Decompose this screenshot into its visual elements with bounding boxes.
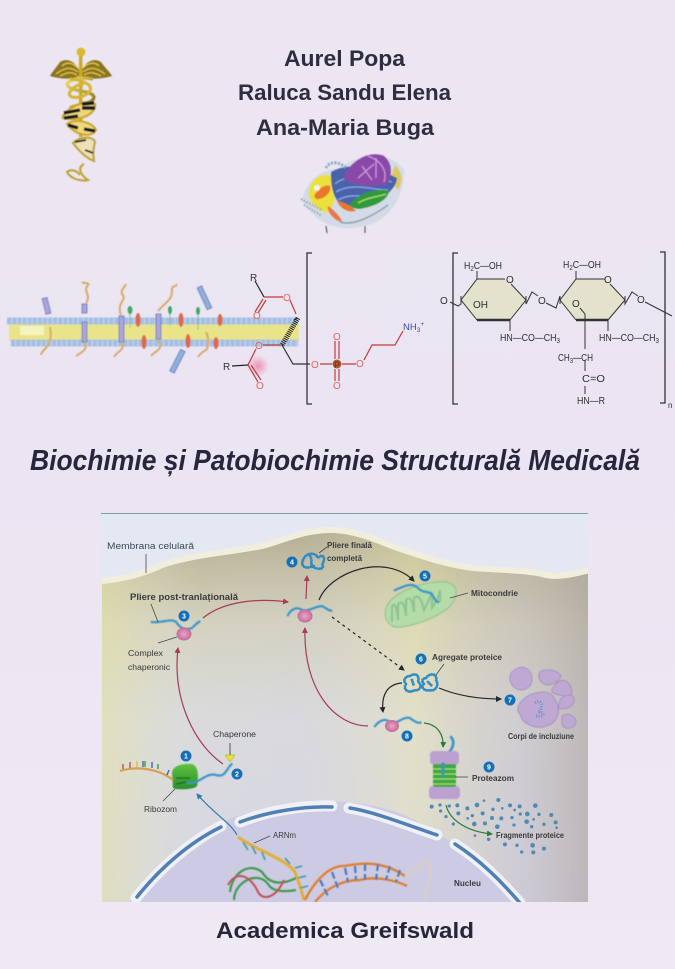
chemical structure: peptidoglycan repeat: 2 [569,265,573,272]
proteasome [429,751,460,799]
diagram labels: Fragmente proteice [496,831,564,840]
chemical structure: peptidoglycan repeat: 3 [557,338,560,345]
diagram labels: Corpi de incluziune [508,732,574,741]
step number badges: 4 [290,560,294,566]
step number badges: 7 [508,698,512,704]
chemical structure: peptidoglycan repeat: HN—CO—CH [500,333,564,344]
step number badges: 8 [405,734,409,740]
step number badges: 5 [423,574,427,580]
illustration: membrane bilayer with proteins [7,282,299,373]
step number badges: 3 [182,614,186,620]
diagram labels [107,541,574,888]
diagram labels: completă [327,554,363,563]
chemical structure: peptidoglycan repeat: HN—CO—CH [599,333,663,344]
icon: animal cell cutaway [301,154,404,233]
chemical structure: phospholipid: NH [403,322,417,333]
diagram labels: Membrana celulară [107,541,194,551]
diagram labels: Ribozom [144,805,177,814]
diagram labels: Complex [128,649,163,658]
icon: caduceus with DNA helix [50,48,112,181]
nuclear envelope [136,806,520,903]
chemical structure: peptidoglycan repeat: n [668,401,672,410]
chemical structure: phospholipid: O [356,359,364,370]
inclusion bodies [510,667,576,728]
diagram labels: chaperonic [128,663,170,672]
chemical structure: phospholipid [223,252,665,404]
chemical structure: peptidoglycan repeat: CH [558,353,572,364]
chemical structure: peptidoglycan repeat: HN—R [577,396,605,407]
chemical structure: peptidoglycan repeat: C=O [582,374,605,385]
ribosome [172,764,198,789]
panel: protein folding diagram [101,513,590,905]
chemical structure: peptidoglycan repeat: O [506,275,514,286]
chemical structure: peptidoglycan repeat: OH [473,300,488,311]
diagram labels: Proteazom [472,774,514,783]
diagram labels: Pliere post-tranlațională [130,592,239,603]
chemical structure: peptidoglycan repeat: H [464,261,471,272]
chemical structure: phospholipid: R [250,273,257,284]
chemical structure: peptidoglycan repeat: C—OH [474,261,502,272]
diagram labels: Chaperone [213,730,257,739]
cell membrane [101,530,590,581]
chemical structure: peptidoglycan repeat: —CH [573,353,593,364]
mRNA strand on ribosome [120,761,173,780]
chemical structure: peptidoglycan repeat: 2 [470,266,474,273]
folding pathway arrows [177,576,368,764]
publisher: Academica Greifswald [216,918,474,943]
chemical structure: phospholipid: O [256,381,264,392]
heading: authors: Raluca Sandu Elena [238,80,452,105]
cytoplasm [101,533,590,905]
leader lines [146,547,468,843]
chemical structure: peptidoglycan repeat: O [440,296,448,307]
step number badges: 9 [487,764,491,772]
blue mRNA export arrow [197,794,237,835]
chemical structure: peptidoglycan repeat: 3 [656,338,659,345]
heading: authors: Ana-Maria Buga [256,115,435,140]
chemical structure: peptidoglycan repeat: O [572,299,580,310]
chemical structure: peptidoglycan repeat [440,260,672,410]
heading: authors: Aurel Popa [284,46,406,71]
chemical structure: peptidoglycan repeat: O [604,275,612,286]
chemical structure: peptidoglycan repeat: 3 [570,358,573,365]
chemical structure: phospholipid: R [223,362,230,373]
DNA and mRNA in nucleus [228,837,430,902]
diagram labels: Nucleu [454,879,481,888]
chemical structure: phospholipid: O [253,311,261,322]
diagram labels: Pliere finală [327,541,373,550]
mitochondrion [385,582,456,627]
folded protein clusters [302,554,437,692]
step number badges: 2 [235,772,239,778]
diagram labels: ARNm [273,831,296,840]
diagram labels: Mitocondrie [471,589,519,598]
chemical structure: phospholipid: P [334,360,340,370]
chaperone marker [225,743,235,762]
step number badges [178,556,516,780]
heading: authors [238,46,452,140]
chemical structure: phospholipid: 3 [417,327,421,334]
chemical structure: peptidoglycan repeat: H [563,260,570,271]
nucleus interior [128,802,523,905]
diagram labels: Agregate proteice [432,653,503,662]
chemical structure: phospholipid: O [255,341,263,352]
step number badges: 1 [184,754,188,760]
chemical structure: peptidoglycan repeat: O [637,295,645,306]
polypeptide chains [152,585,453,783]
chemical structure: peptidoglycan repeat: O [538,296,546,307]
chain entering proteasome [442,763,444,776]
chemical structure: phospholipid: O [333,381,341,392]
protein fragments [430,798,558,854]
chemical structure: peptidoglycan repeat: C—OH [573,260,601,271]
chemical structure: phospholipid: + [420,321,424,328]
chemical structure: phospholipid: O [311,360,319,371]
chaperonin complexes [176,610,399,732]
chemical structure: phospholipid: O [283,293,291,304]
step number badges: 6 [419,656,423,664]
chemical structure: phospholipid: O [333,332,341,343]
